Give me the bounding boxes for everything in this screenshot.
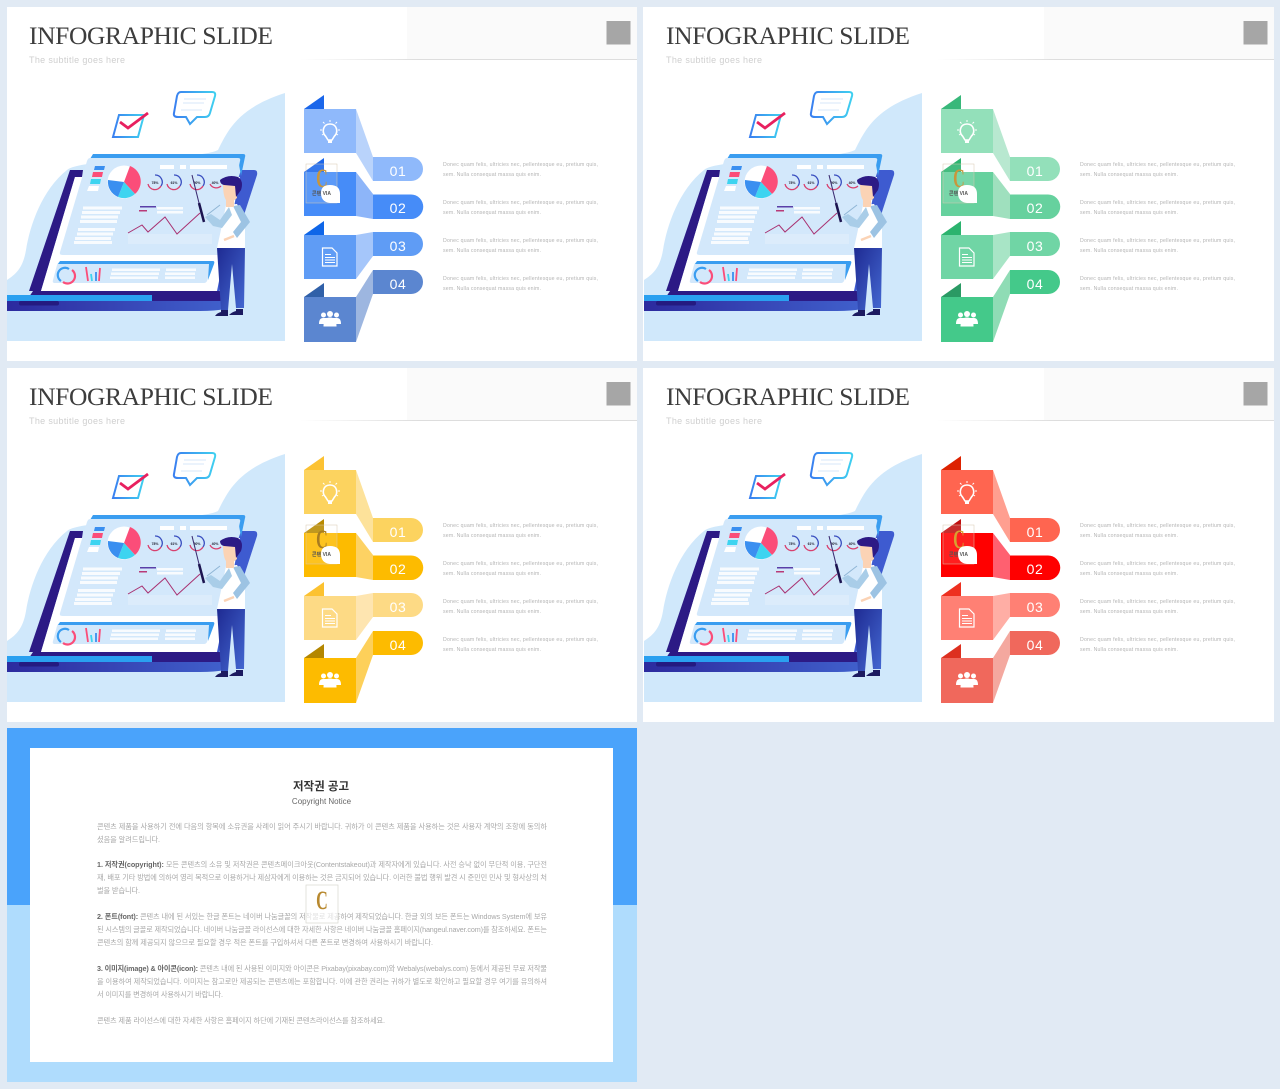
ribbon diagram: 01 bbox=[1027, 524, 1043, 540]
panel: yellow slide bbox=[7, 368, 637, 722]
text blocks: sem. Nulla consequat massa quis enim. bbox=[1080, 571, 1178, 577]
text blocks: sem. Nulla consequat massa quis enim. bbox=[1080, 609, 1178, 615]
heading: copyright notice: 저작권 공고 bbox=[293, 779, 349, 793]
text blocks: Donec quam felis, ultricies nec, pellentesque eu, pretium quis, bbox=[1080, 200, 1235, 206]
watermark: 콘텐 VIA bbox=[312, 551, 331, 558]
text blocks: Donec quam felis, ultricies nec, pellentesque eu, pretium quis, bbox=[443, 200, 598, 206]
text blocks: sem. Nulla consequat massa quis enim. bbox=[443, 210, 541, 216]
text blocks: sem. Nulla consequat massa quis enim. bbox=[443, 571, 541, 577]
illustration: laptop dashboard and presenter bbox=[7, 453, 285, 702]
text blocks: Donec quam felis, ultricies nec, pellentesque eu, pretium quis, bbox=[443, 523, 598, 529]
subtitle: The subtitle goes here bbox=[29, 55, 125, 65]
intro text bbox=[97, 822, 547, 844]
watermark: 콘텐 VIA bbox=[312, 190, 331, 197]
text blocks: Donec quam felis, ultricies nec, pellentesque eu, pretium quis, bbox=[1080, 637, 1235, 643]
watermark: C bbox=[953, 164, 965, 193]
section 2: font: 콘텐츠의 함께 제공되지 않으므로 필요할 경우 적은 폰트를 구입하셔서 다른 폰트로 변경하여 사용하시기 바랍니다. bbox=[97, 938, 433, 947]
text blocks: sem. Nulla consequat massa quis enim. bbox=[1080, 533, 1178, 539]
panel: red slide bbox=[643, 368, 1274, 722]
section 3: image and icon bbox=[97, 964, 547, 999]
text blocks: Donec quam felis, ultricies nec, pellentesque eu, pretium quis, bbox=[1080, 523, 1235, 529]
text blocks bbox=[443, 162, 598, 292]
icon: grey square bbox=[606, 382, 630, 406]
watermark bbox=[306, 885, 338, 923]
closing note: 콘텐츠 제품 라이선스에 대한 자세한 사항은 홈페이지 하단에 기재된 콘텐츠라이선스를 참조하세요. bbox=[97, 1016, 385, 1025]
illustration: laptop dashboard and presenter bbox=[644, 92, 922, 341]
title: INFOGRAPHIC SLIDE bbox=[666, 21, 910, 50]
panel: green slide bbox=[643, 7, 1274, 361]
text blocks: Donec quam felis, ultricies nec, pellentesque eu, pretium quis, bbox=[443, 561, 598, 567]
watermark: C bbox=[953, 525, 965, 554]
watermark: C bbox=[316, 164, 328, 193]
text blocks bbox=[443, 523, 598, 653]
watermark: C bbox=[316, 886, 328, 915]
subtitle: The subtitle goes here bbox=[666, 416, 762, 426]
section 1: copyright: 벌을 받습니다. bbox=[97, 886, 140, 895]
ribbon diagram: 03 bbox=[390, 599, 406, 615]
ribbon diagram: 03 bbox=[390, 238, 406, 254]
watermark: C bbox=[316, 525, 328, 554]
title: INFOGRAPHIC SLIDE bbox=[29, 382, 273, 411]
ribbon diagram: 01 bbox=[390, 163, 406, 179]
section 1: copyright bbox=[97, 860, 547, 895]
ribbon diagram: 02 bbox=[1027, 561, 1043, 577]
section 3: image and icon: 을 이용하여 제작되었습니다. 이미지는 참고로만 제공되는 콘텐츠에는 포함합니다. 이에 관한 권리는 귀하가 별도로 확인하고 필요할 경우 여기를 유의하셔 bbox=[97, 977, 547, 986]
ribbon diagram: 04 bbox=[390, 637, 406, 653]
ribbon diagram: 02 bbox=[1027, 200, 1043, 216]
text blocks: sem. Nulla consequat massa quis enim. bbox=[1080, 286, 1178, 292]
ribbon diagram bbox=[304, 456, 423, 703]
text blocks: sem. Nulla consequat massa quis enim. bbox=[443, 286, 541, 292]
section 3: image and icon: 3. 이미지(image) & 아이콘(icon): 콘텐츠 내에 된 사용된 이미지와 아이콘은 Pixabay(pixabay.com)와 Webalys(webalys.com) 등에서 제공된 무료 저작물 bbox=[97, 964, 547, 973]
panel: blue slide bbox=[7, 7, 637, 361]
ribbon diagram: 04 bbox=[1027, 637, 1043, 653]
text blocks: Donec quam felis, ultricies nec, pellentesque eu, pretium quis, bbox=[443, 637, 598, 643]
subtitle: The subtitle goes here bbox=[666, 55, 762, 65]
watermark bbox=[306, 525, 340, 564]
section 3: image and icon: 서 이미지를 변경하여 사용하시기 바랍니다. bbox=[97, 990, 223, 999]
text blocks: sem. Nulla consequat massa quis enim. bbox=[443, 609, 541, 615]
section 2: font: 2. 폰트(font): 콘텐츠 내에 된 서있는 한글 폰트는 네이버 나눔글꼴의 저작물로 제공하여 제작되었습니다. 한글 외의 보든 폰트는 Windows System에 보유 bbox=[97, 912, 547, 921]
ribbon diagram: 04 bbox=[1027, 276, 1043, 292]
ribbon diagram: 03 bbox=[1027, 599, 1043, 615]
watermark bbox=[943, 525, 977, 564]
intro text: 콘텐츠 제품을 사용하기 전에 다음의 항목에 소유권을 사례이 읽어 주시기 바랍니다. 귀하가 이 콘텐츠 제품을 사용하는 것은 사용자 계약의 조항에 동의하 bbox=[97, 822, 547, 831]
ribbon diagram: 03 bbox=[1027, 238, 1043, 254]
ribbon diagram bbox=[304, 95, 423, 342]
panel: copyright notice bbox=[7, 728, 637, 1082]
watermark: 콘텐 VIA bbox=[949, 190, 968, 197]
text blocks: sem. Nulla consequat massa quis enim. bbox=[443, 172, 541, 178]
text blocks: Donec quam felis, ultricies nec, pellentesque eu, pretium quis, bbox=[1080, 276, 1235, 282]
subtitle: The subtitle goes here bbox=[29, 416, 125, 426]
illustration: laptop dashboard and presenter bbox=[644, 453, 922, 702]
text blocks: Donec quam felis, ultricies nec, pellentesque eu, pretium quis, bbox=[443, 599, 598, 605]
text blocks: Donec quam felis, ultricies nec, pellentesque eu, pretium quis, bbox=[443, 162, 598, 168]
text blocks: sem. Nulla consequat massa quis enim. bbox=[443, 248, 541, 254]
text blocks: sem. Nulla consequat massa quis enim. bbox=[1080, 210, 1178, 216]
text blocks: sem. Nulla consequat massa quis enim. bbox=[443, 533, 541, 539]
ribbon diagram bbox=[941, 95, 1060, 342]
icon: grey square bbox=[606, 21, 630, 44]
text blocks: sem. Nulla consequat massa quis enim. bbox=[1080, 172, 1178, 178]
ribbon diagram bbox=[941, 456, 1060, 703]
section 1: copyright: 1. 저작권(copyright): 모든 콘텐츠의 소유 및 저작권은 콘텐츠메이크아웃(Contentstakeout)과 제작자에게 있습니다. 사전 승낙 없이 무단적 이용, 구단전 bbox=[97, 860, 547, 869]
ribbon diagram: 04 bbox=[390, 276, 406, 292]
text blocks: Donec quam felis, ultricies nec, pellentesque eu, pretium quis, bbox=[1080, 162, 1235, 168]
text blocks bbox=[1080, 162, 1235, 292]
ribbon diagram: 01 bbox=[390, 524, 406, 540]
section 1: copyright: 재, 배포 기타 방법에 의하여 영리 목적으로 이용하거나 제삼자에게 이용하는 것은 금지되어 있습니다. 이러한 불법 행위 발견 시 준민민 민사 및 형사상의 처 bbox=[97, 873, 547, 882]
ribbon diagram: 01 bbox=[1027, 163, 1043, 179]
watermark bbox=[306, 164, 340, 203]
section 2: font: 된 시스템의 글꼴로 제작되었습니다. 네이버 나눔글꼴 라이선스에 대한 자세한 사항은 네이버 나눔글꼴 홈페이지(hangeul.naver.com)를 참조하세요. 폰트는 bbox=[97, 925, 547, 934]
subheading: Copyright Notice bbox=[292, 797, 352, 806]
watermark bbox=[943, 164, 977, 203]
text blocks: Donec quam felis, ultricies nec, pellentesque eu, pretium quis, bbox=[1080, 599, 1235, 605]
intro text: 셨음을 알려드립니다. bbox=[97, 835, 160, 844]
section 2: font bbox=[97, 912, 547, 947]
ribbon diagram: 02 bbox=[390, 200, 406, 216]
title: INFOGRAPHIC SLIDE bbox=[29, 21, 273, 50]
text blocks: sem. Nulla consequat massa quis enim. bbox=[1080, 647, 1178, 653]
text blocks bbox=[1080, 523, 1235, 653]
text blocks: Donec quam felis, ultricies nec, pellentesque eu, pretium quis, bbox=[443, 238, 598, 244]
title: INFOGRAPHIC SLIDE bbox=[666, 382, 910, 411]
text blocks: sem. Nulla consequat massa quis enim. bbox=[443, 647, 541, 653]
watermark: 콘텐 VIA bbox=[949, 551, 968, 558]
icon: grey square bbox=[1244, 382, 1268, 406]
ribbon diagram: 02 bbox=[390, 561, 406, 577]
illustration: laptop dashboard and presenter bbox=[7, 92, 285, 341]
icon: grey square bbox=[1244, 21, 1268, 44]
text blocks: sem. Nulla consequat massa quis enim. bbox=[1080, 248, 1178, 254]
text blocks: Donec quam felis, ultricies nec, pellentesque eu, pretium quis, bbox=[443, 276, 598, 282]
text blocks: Donec quam felis, ultricies nec, pellentesque eu, pretium quis, bbox=[1080, 238, 1235, 244]
text blocks: Donec quam felis, ultricies nec, pellentesque eu, pretium quis, bbox=[1080, 561, 1235, 567]
